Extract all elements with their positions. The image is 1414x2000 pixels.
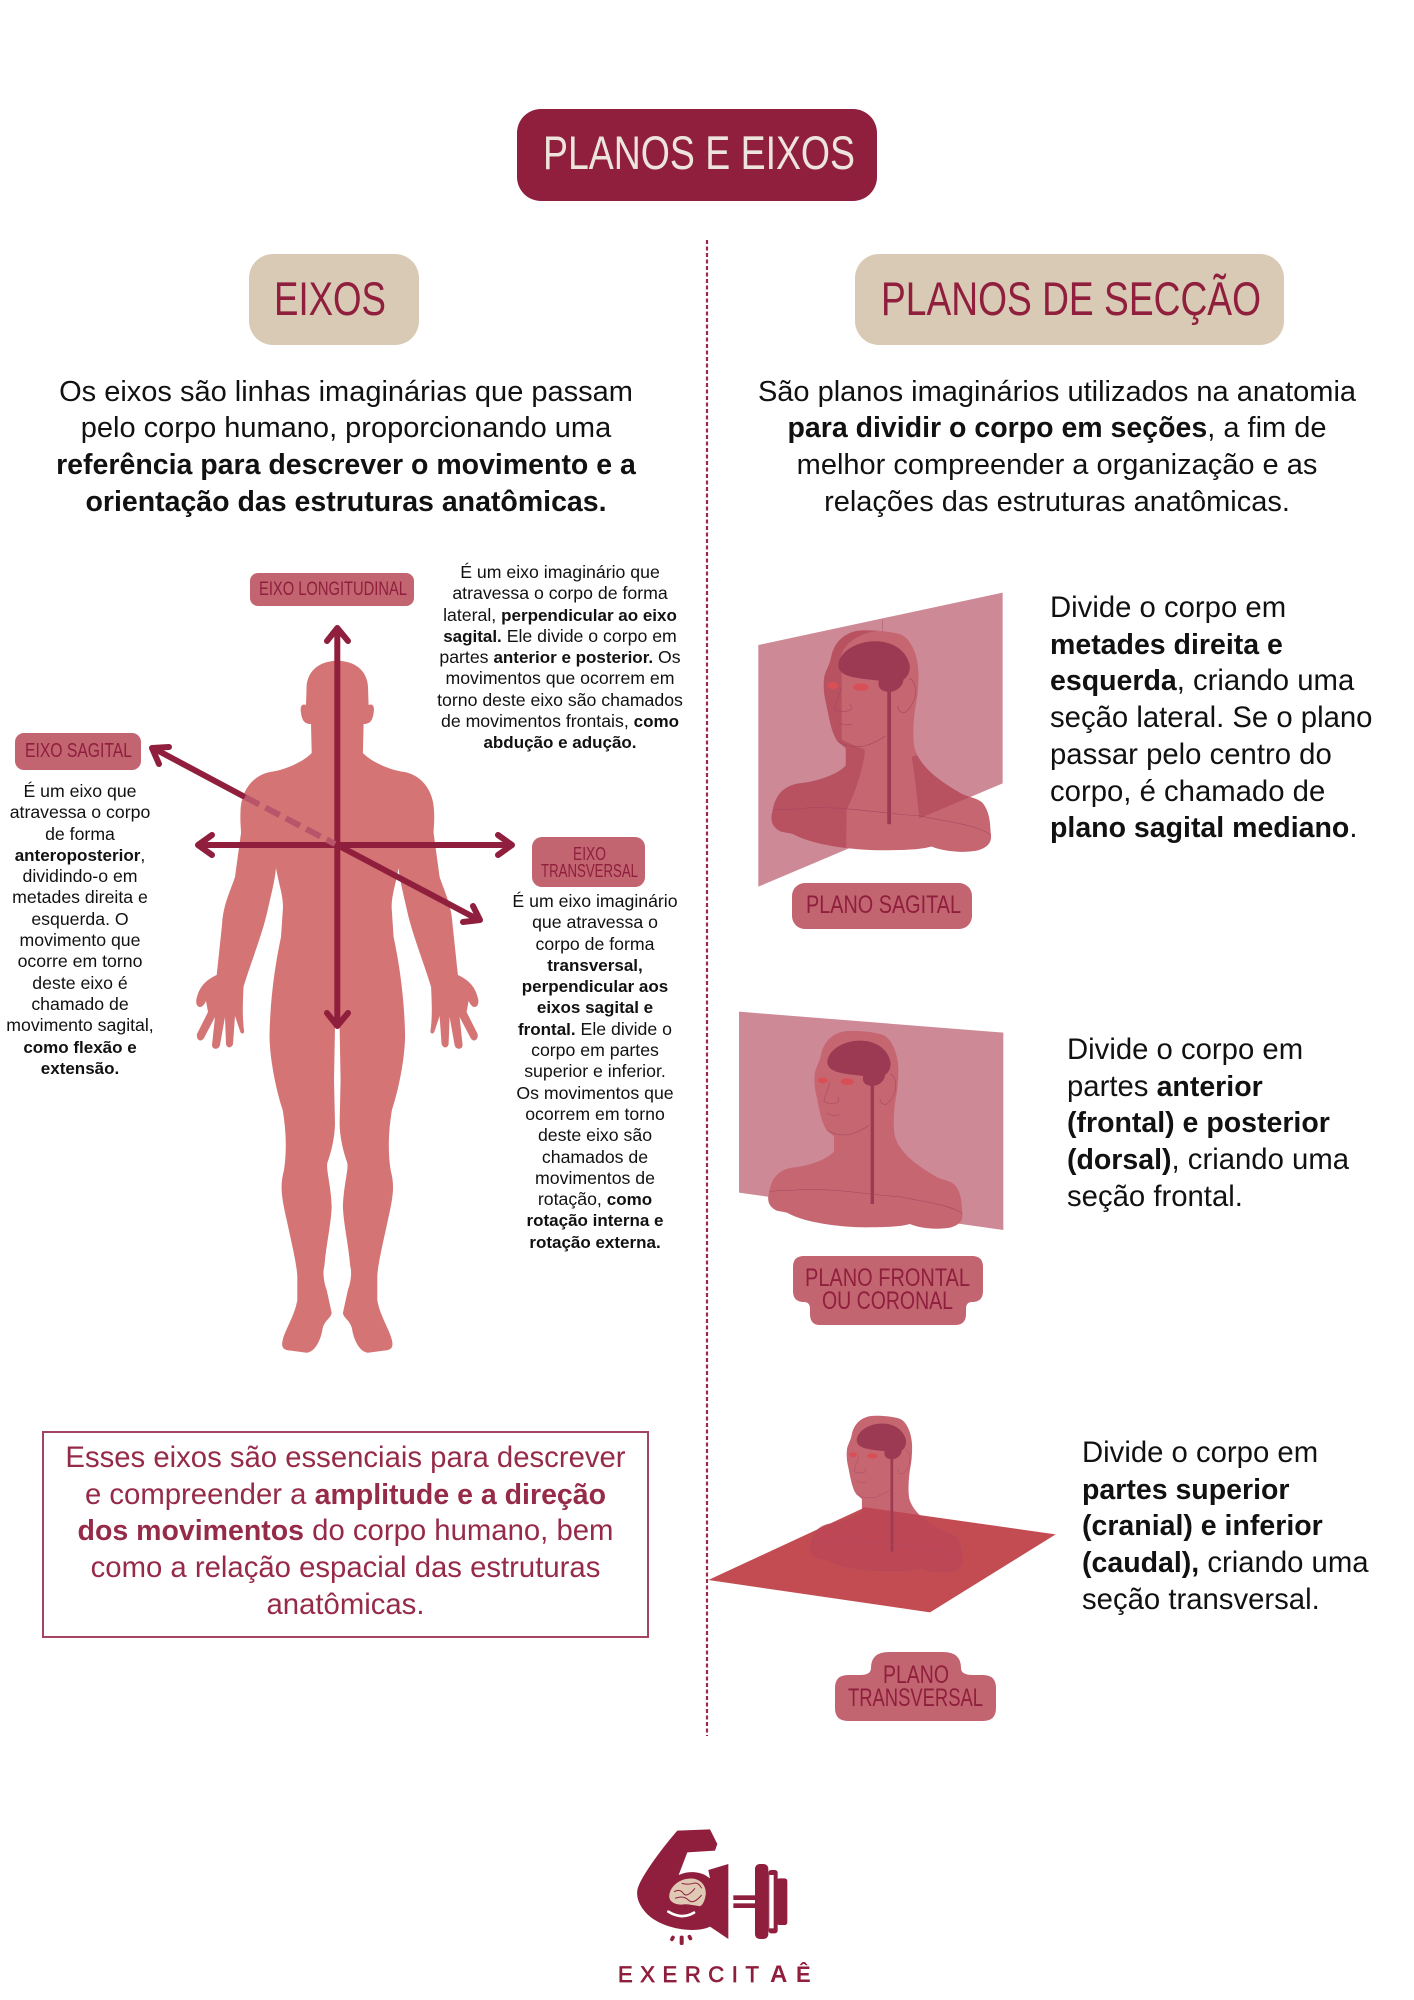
text: eixo transversal description: corpo em partes (531, 1040, 659, 1060)
icon: flexed arm and dumbbell (637, 1829, 787, 1945)
title (517, 109, 877, 201)
text: eixo transversal description: corpo de forma (536, 934, 654, 954)
text: plano frontal description: Divide o corpo em (1067, 1033, 1303, 1066)
heading: eixos (249, 254, 419, 345)
label: plano frontal ou coronal (793, 1256, 983, 1325)
wordmark: Ê (796, 1962, 811, 1987)
text: callout: e compreender a amplitude e a direção (85, 1478, 606, 1511)
text: eixo transversal description: chamados de (542, 1147, 648, 1167)
label: eixo sagital (15, 733, 141, 770)
text: plano sagital description: passar pelo centro do (1050, 738, 1332, 771)
label: eixo longitudinal: EIXO LONGITUDINAL (259, 579, 407, 600)
text: eixo longitudinal description: abdução e adução. (483, 733, 637, 752)
text: callout: como a relação espacial das estruturas (91, 1551, 600, 1584)
label: eixo transversal: TRANSVERSAL (541, 861, 638, 881)
text: plano frontal description: (frontal) e posterior (1067, 1107, 1330, 1139)
text: plano frontal description (1067, 1033, 1350, 1213)
heading: planos de secção: PLANOS DE SECÇÃO (881, 272, 1261, 325)
label: plano transversal (835, 1652, 996, 1721)
text: eixo sagital description: movimento sagital, (6, 1015, 154, 1035)
text: plano sagital description: esquerda, criando uma (1050, 664, 1354, 697)
text: eixo transversal description: movimentos de (535, 1168, 655, 1188)
text: eixos intro (56, 376, 636, 518)
arrow: longitudinal axis (327, 628, 348, 1026)
text: planos intro: melhor compreender a organização e as (797, 449, 1317, 481)
text: eixos intro: Os eixos são linhas imaginárias que passam (59, 376, 633, 408)
text: plano transversal description: seção transversal. (1082, 1583, 1320, 1616)
text: callout (65, 1441, 626, 1621)
text: eixo sagital description: atravessa o corpo (10, 802, 150, 822)
text: eixo longitudinal description: partes anterior e posterior. Os (439, 647, 681, 667)
body silhouette (196, 661, 478, 1353)
text: eixo transversal description: frontal. Ele divide o (518, 1019, 672, 1039)
text: eixo transversal description: que atravessa o (532, 912, 658, 932)
text: eixo longitudinal description (437, 562, 683, 752)
text: callout: Esses eixos são essenciais para descrever (65, 1441, 626, 1474)
label: plano transversal: TRANSVERSAL (848, 1684, 983, 1712)
text: eixo transversal description: perpendicular aos (522, 977, 668, 996)
text: eixo sagital description: movimento que (20, 930, 140, 950)
text: eixo sagital description: chamado de (31, 994, 129, 1014)
text: plano sagital description: seção lateral. Se o plano (1050, 701, 1372, 734)
text: eixo sagital description: metades direita e (12, 887, 148, 907)
text: eixo longitudinal description: de movimentos frontais, como (441, 711, 679, 731)
heading: planos de secção (855, 254, 1284, 345)
label: eixo transversal: EIXO (573, 844, 606, 864)
text: eixo longitudinal description: torno deste eixo são chamados (437, 690, 683, 710)
text: eixo transversal description: Os movimentos que (516, 1083, 674, 1103)
text: eixo sagital description: esquerda. O (31, 909, 129, 929)
logo: exercitaê (618, 1829, 811, 1988)
text: eixo transversal description (512, 891, 678, 1252)
text: eixo sagital description: de forma (45, 824, 115, 844)
text: eixo sagital description (6, 781, 154, 1078)
text: planos intro: para dividir o corpo em seções, a fim de (787, 412, 1327, 444)
text: eixo sagital description: ocorre em torno (18, 951, 142, 971)
text: eixo transversal description: É um eixo imaginário (512, 891, 678, 911)
text: eixo sagital description: deste eixo é (32, 973, 128, 993)
text: planos intro (758, 376, 1356, 518)
text: plano transversal description: partes superior (1082, 1474, 1290, 1506)
text: planos intro: São planos imaginários utilizados na anatomia (758, 376, 1356, 408)
illustration: frontal plane (739, 1012, 1003, 1230)
text: callout: dos movimentos do corpo humano, bem (78, 1514, 613, 1547)
text: plano frontal description: partes anterior (1067, 1070, 1263, 1103)
wordmark: A (770, 1961, 787, 1988)
text: plano sagital description: Divide o corpo em (1050, 591, 1286, 624)
text: plano transversal description: Divide o corpo em (1082, 1436, 1318, 1469)
label: eixo sagital: EIXO SAGITAL (25, 740, 132, 762)
text: eixo longitudinal description: movimentos que ocorrem em (445, 668, 675, 688)
text: plano sagital description: plano sagital mediano. (1050, 811, 1357, 844)
text: plano frontal description: seção frontal. (1067, 1180, 1243, 1213)
text: plano transversal description: (cranial) e inferior (1082, 1510, 1323, 1542)
text: planos intro: relações das estruturas anatômicas. (824, 486, 1290, 518)
label: plano sagital: PLANO SAGITAL (806, 891, 961, 919)
text: plano sagital description: metades direita e (1050, 629, 1283, 661)
text: plano transversal description: (caudal), criando uma (1082, 1546, 1369, 1579)
text: eixo transversal description: ocorrem em torno (525, 1104, 665, 1124)
arrow: transverse axis (198, 835, 512, 855)
text: eixo sagital description: extensão. (41, 1059, 119, 1078)
text: eixos intro: orientação das estruturas anatômicas. (85, 486, 607, 518)
text: eixo transversal description: rotação, como (538, 1189, 652, 1209)
text: eixo sagital description: É um eixo que (23, 781, 137, 801)
text: callout: anatômicas. (267, 1588, 424, 1621)
text: eixos intro: pelo corpo humano, proporcionando uma (81, 412, 611, 444)
text: eixo longitudinal description: atravessa o corpo de forma (452, 583, 668, 603)
text: eixo transversal description: superior e inferior. (524, 1061, 666, 1081)
text: eixo longitudinal description: lateral, perpendicular ao eixo (443, 605, 677, 625)
heading: eixos: EIXOS (274, 272, 386, 325)
human body figure with axes (152, 628, 512, 1353)
text: plano sagital description (1050, 591, 1372, 844)
arrow: sagittal axis (152, 747, 480, 922)
text: eixo sagital description: anteroposterior, (15, 845, 145, 865)
illustration: transverse plane (708, 1416, 1056, 1612)
label: eixo transversal (532, 837, 645, 887)
text: eixo sagital description: dividindo-o em (22, 866, 138, 886)
text: plano frontal description: (dorsal), criando uma (1067, 1143, 1349, 1176)
text: plano sagital description: corpo, é chamado de (1050, 775, 1325, 808)
illustration: sagittal plane (753, 593, 1003, 887)
callout box (43, 1432, 648, 1637)
label: plano frontal ou coronal: PLANO FRONTAL (805, 1264, 970, 1292)
text: plano transversal description (1082, 1436, 1369, 1616)
label: plano transversal: PLANO (883, 1661, 949, 1689)
text: eixo transversal description: eixos sagital e (537, 998, 653, 1017)
text: eixo transversal description: deste eixo são (538, 1125, 652, 1145)
label: plano frontal ou coronal: OU CORONAL (822, 1287, 953, 1315)
title: PLANOS E EIXOS (543, 126, 855, 179)
text: eixos intro: referência para descrever o movimento e a (56, 449, 636, 481)
text: eixo longitudinal description: sagital. Ele divide o corpo em (443, 626, 677, 646)
text: eixo longitudinal description: É um eixo imaginário que (460, 562, 660, 582)
divider (706, 240, 708, 1736)
text: eixo transversal description: transversal, (547, 956, 643, 975)
text: eixo sagital description: como flexão e (23, 1038, 137, 1057)
text: eixo transversal description: rotação externa. (529, 1233, 661, 1252)
wordmark: EXERCIT (618, 1962, 767, 1987)
text: eixo transversal description: rotação interna e (526, 1211, 664, 1230)
label: plano sagital (792, 883, 972, 929)
label: eixo longitudinal (250, 573, 414, 606)
